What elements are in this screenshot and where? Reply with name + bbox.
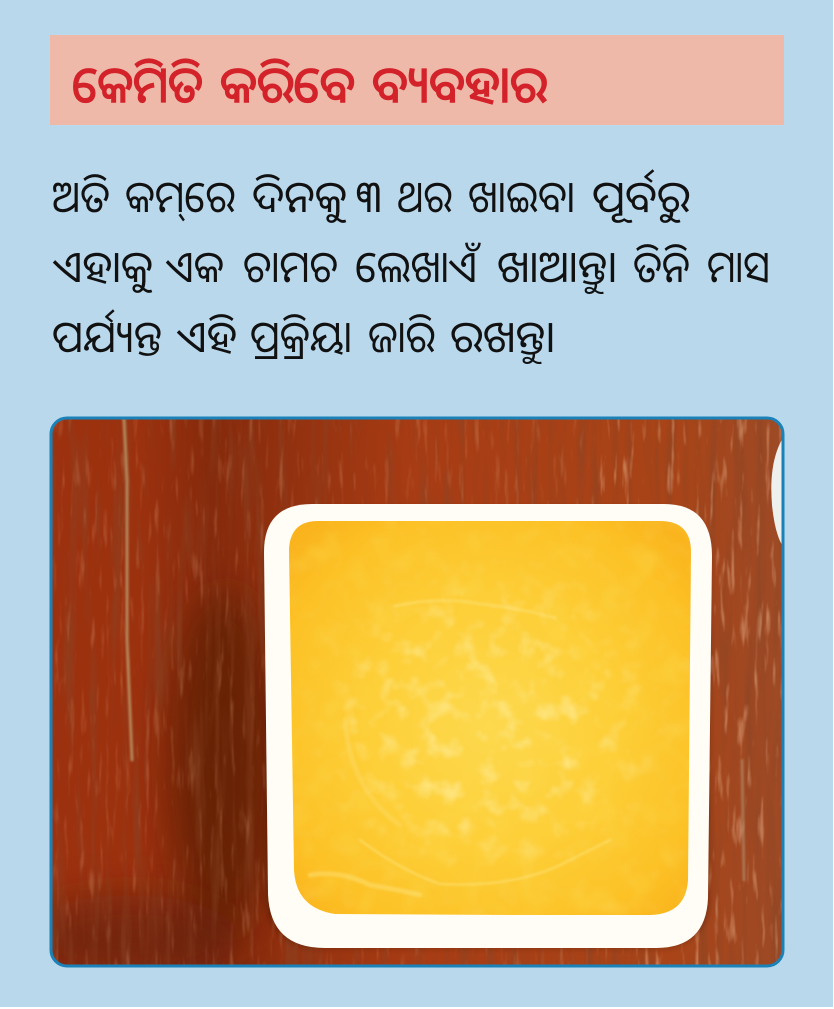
white bowl <box>264 504 712 948</box>
body line 1: ୩ <box>356 173 381 222</box>
heading banner <box>50 35 784 125</box>
heading text <box>72 57 547 113</box>
body line 1: ଥର <box>397 173 452 222</box>
body line 2: ଖାଆନ୍ତୁ। <box>497 243 618 294</box>
body line 2: ଏକ <box>165 243 224 292</box>
body line 1: ଖାଇବା <box>468 173 575 222</box>
body line 2: ଏହାକୁ <box>52 243 153 293</box>
body line 3: ପ୍ରକ୍ରିୟା <box>250 313 352 362</box>
body line 1: କମ୍‌ରେ <box>125 173 235 222</box>
body line 1: ଅତି <box>52 173 110 222</box>
wooden table <box>20 417 784 985</box>
heading text: କେମିତି <box>72 57 203 113</box>
photo: bowl of yellow paste on wooden table <box>20 417 784 985</box>
spoon edge at right <box>771 440 782 544</box>
yellow paste <box>289 521 691 915</box>
body line 2: ତିନି <box>633 243 690 292</box>
photo frame <box>51 418 783 966</box>
body line 1: ପୂର୍ବରୁ <box>592 169 690 223</box>
body line 1: ଦିନକୁ <box>252 173 347 223</box>
heading text: କରିବେ <box>220 57 355 113</box>
body line 3: ପର୍ଯ୍ୟନ୍ତ <box>52 309 162 362</box>
paste texture <box>285 515 695 920</box>
body line 1 <box>52 169 690 223</box>
body line 3: ଏହି <box>176 313 237 362</box>
body line 3: ଜାରି <box>368 313 435 362</box>
body line 3: ରଖନ୍ତୁ। <box>450 313 556 364</box>
bowl shadow <box>266 508 710 948</box>
body line 2 <box>52 242 770 294</box>
body text <box>52 169 770 364</box>
body line 2: ମାସ <box>707 243 770 292</box>
body line 3 <box>52 309 556 364</box>
heading text: ବ୍ୟବହାର <box>372 57 547 113</box>
body line 2: ଲେଖାଏଁ <box>355 242 482 292</box>
body line 2: ଚାମଚ <box>243 243 338 292</box>
